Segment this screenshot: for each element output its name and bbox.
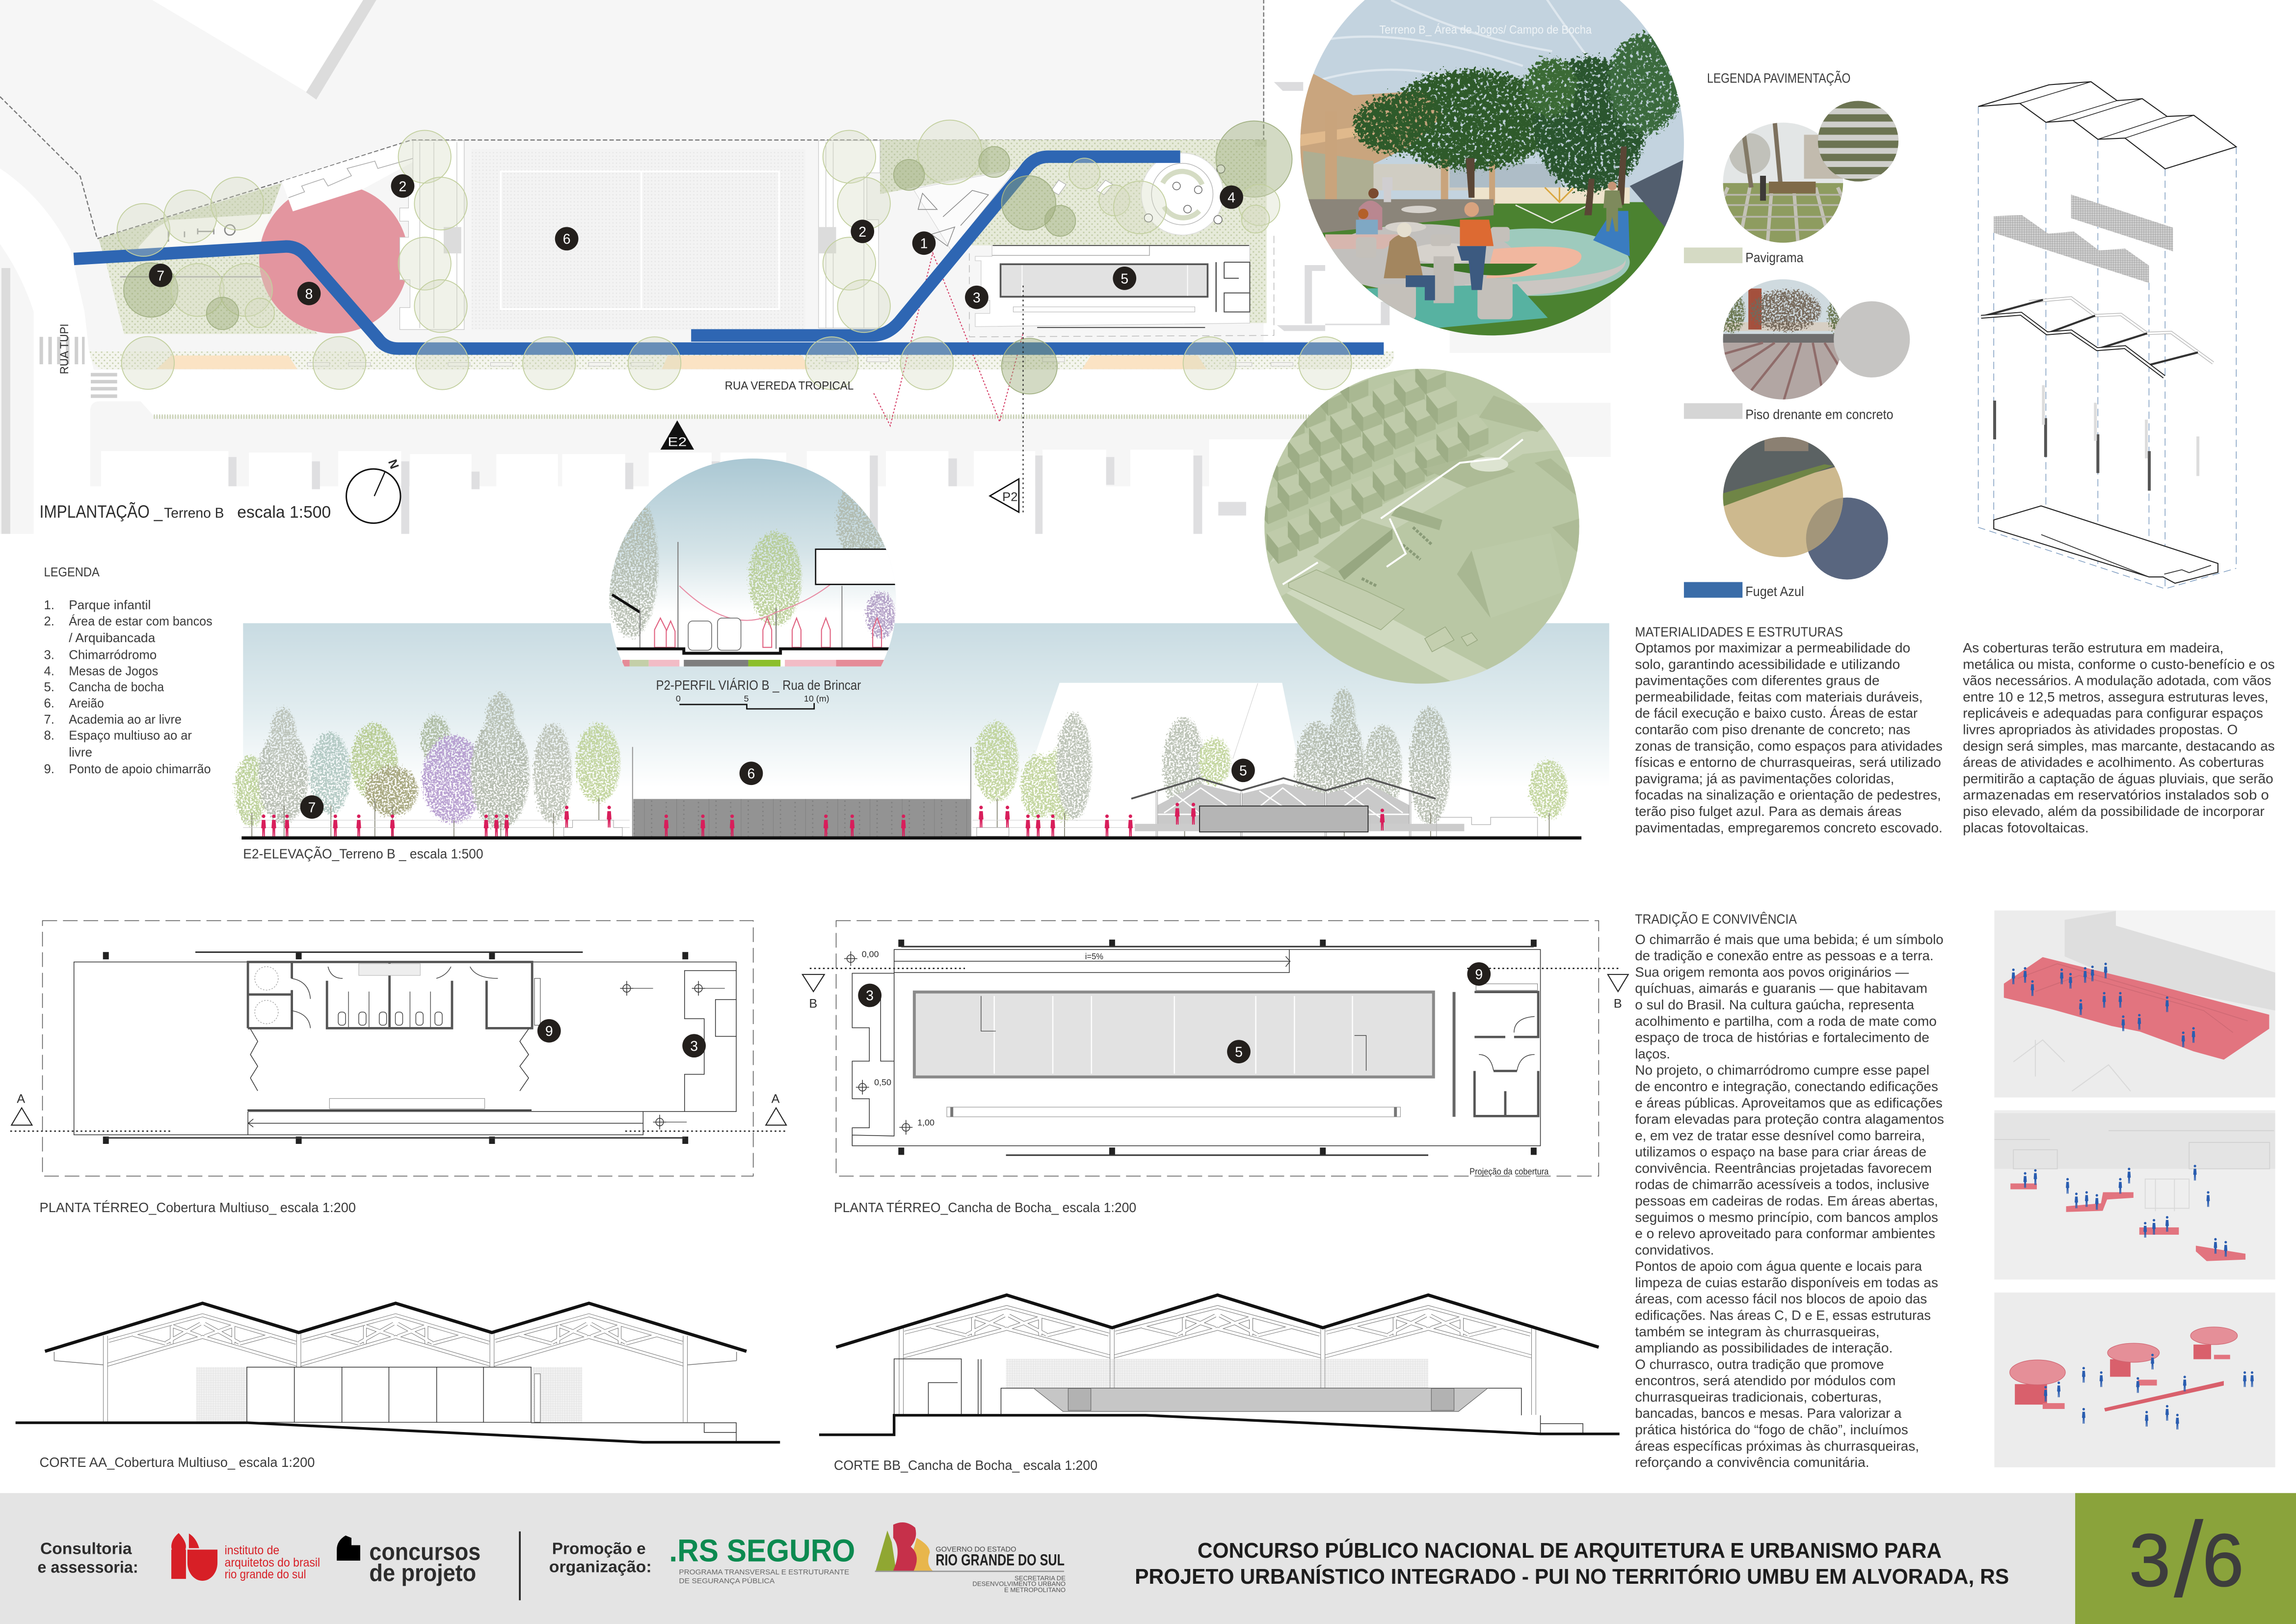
text block: tradição e convivência: limpeza de cuias estarão disponíveis em todas as [1635, 1275, 1938, 1290]
legend: Parque infantil [69, 598, 151, 612]
level marks [844, 951, 857, 966]
floor plan: cancha de bocha: 0,00 [862, 949, 879, 959]
footer band [0, 1493, 2296, 1624]
logo: Governo do Estado RS [875, 1522, 1066, 1594]
floor plan: cobertura multiuso: 3 [690, 1039, 698, 1055]
legend: Areião [69, 697, 104, 710]
bunting lines [874, 253, 1023, 426]
elevation trees [236, 688, 1568, 829]
render caption: Terreno B_ Área de Jogos/ Campo de Bocha [1379, 24, 1592, 37]
roof layer [1978, 81, 2236, 169]
text block: materialidades e estruturas: permeabilidade, feitas com materiais duráveis, [1635, 689, 1923, 704]
plaza surfaces [1437, 228, 1630, 296]
text block: coberturas: vãos necessários. A modulação adotada, com vãos [1963, 673, 2271, 688]
text block: coberturas: livres apropriados às atividades propostas. O [1963, 722, 2238, 737]
text block: coberturas: piso elevado, além da possibilidade de incorporar [1963, 804, 2265, 819]
legend: 4. [44, 664, 54, 678]
exploded axonometric of structure [1978, 81, 2236, 589]
panel: elevation E2 [236, 623, 1609, 839]
site plan markers: 2 [399, 179, 406, 194]
steps [852, 973, 894, 1145]
caption: plan A: PLANTA TÉRREO_Cobertura Multiuso_ escala 1:200 [40, 1200, 356, 1215]
mesh panels [2071, 194, 2173, 251]
base slab [1994, 506, 2218, 583]
text block: coberturas: áreas de atividades e acolhimento. As coberturas [1963, 755, 2264, 770]
legend: Cancha de bocha [69, 680, 164, 694]
logo: Governo do Estado RS: RIO GRANDE DO SUL [935, 1551, 1065, 1569]
text block: tradição e convivência: Pontos de apoio com água quente e locais para [1635, 1259, 1922, 1274]
swatch group: pavigrama [1684, 101, 1903, 265]
logo: RS Seguro [669, 1533, 855, 1585]
text block: tradição e convivência: também se integram às churrasqueiras, [1635, 1324, 1880, 1339]
main contest title: CONCURSO PÚBLICO NACIONAL DE ARQUITETURA E URBANISMO PARA [1198, 1539, 1942, 1563]
logo: Governo do Estado RS: GOVERNO DO ESTADO [935, 1545, 1016, 1553]
text block: coberturas: armazenadas em reservatórios instalados sob o [1963, 787, 2269, 803]
ramp [894, 949, 1290, 973]
legend: Ponto de apoio chimarrão [69, 762, 211, 776]
people [1384, 234, 1423, 278]
legend: Mesas de Jogos [69, 664, 158, 678]
text block: tradição e convivência: churrasqueiras tradicionais, coberturas, [1635, 1389, 1882, 1405]
swatch group: piso drenante: Piso drenante em concreto [1745, 406, 1894, 422]
image: axon chimarródromo stepped seating [1994, 910, 2275, 1097]
legend [44, 566, 213, 776]
floor plan: cobertura multiuso: A [17, 1092, 25, 1106]
bocha court [914, 992, 1434, 1077]
text block: materialidades e estruturas: zonas de transição, como espaços para atividades [1635, 738, 1943, 754]
tables and stools [1409, 243, 1482, 264]
game tables plaza [1141, 153, 1223, 235]
section AA [16, 1303, 780, 1442]
logo: concursos de projeto: de projeto [369, 1559, 476, 1586]
logo: Governo do Estado RS: E METROPOLITANO [1004, 1586, 1066, 1594]
white path [1282, 439, 1523, 584]
panel: site plan (implantação) [0, 0, 1611, 535]
legend: Chimarródromo [69, 649, 157, 662]
swatch group: piso drenante [1684, 278, 1910, 422]
legend: LEGENDA [44, 566, 100, 579]
page number panel [2075, 1493, 2296, 1624]
text block: tradição e convivência: utilizamos o espaço na base para criar áreas de [1635, 1144, 1926, 1160]
text block: coberturas: As coberturas terão estrutura em madeira, [1963, 640, 2223, 655]
multipurpose pink circle [259, 184, 408, 333]
text block: materialidades e estruturas: Optamos por maximizar a permeabilidade do [1635, 640, 1910, 655]
icon: north arrow: N [385, 458, 401, 471]
section marker P2: P2 [1002, 490, 1017, 504]
site plan markers: 3 [973, 290, 981, 306]
text block: tradição e convivência: foram elevadas para proteção contra alagamentos [1635, 1111, 1944, 1127]
section marks B [802, 974, 1629, 992]
text block: tradição e convivência: bancadas, bancos e mesas. Para valorizar a [1635, 1406, 1902, 1421]
legend: / Arquibancada [69, 631, 156, 645]
label: Rua Vereda Tropical: RUA VEREDA TROPICAL [725, 379, 854, 393]
text block: tradição e convivência: TRADIÇÃO E CONVIVÊNCIA [1635, 912, 1797, 927]
scale bar: 10 (m) [804, 694, 829, 704]
text block: tradição e convivência: O churrasco, outra tradição que promove [1635, 1357, 1884, 1372]
floor plan: cobertura multiuso [10, 920, 788, 1176]
legend: 6. [44, 697, 54, 710]
text block: materialidades e estruturas: MATERIALIDADES E ESTRUTURAS [1635, 624, 1843, 639]
swatch group: fulget azul [1684, 436, 1888, 599]
section marker E2 [661, 420, 694, 450]
text block: tradição e convivência: de encontro e integração, conectando edificações [1635, 1079, 1938, 1094]
text block: materialidades e estruturas: terão piso fulget azul. Para as demais áreas [1635, 804, 1901, 819]
main contest title [1135, 1539, 2009, 1589]
building [1299, 66, 1444, 227]
street benches [308, 357, 1293, 366]
crosswalks [40, 337, 84, 364]
text block: tradição e convivência: O chimarrão é mais que uma bebida; é um símbolo [1635, 932, 1944, 947]
text block: tradição e convivência: encontros, será atendido por módulos com [1635, 1373, 1896, 1388]
trees [117, 120, 1352, 394]
sand field [472, 149, 805, 329]
text block: coberturas: entre 10 e 12,5 metros, assegura estruturas leves, [1963, 689, 2269, 704]
section line P2 [1023, 286, 1024, 513]
text block: materialidades e estruturas: solo, garantindo acessibilidade e utilizando [1635, 657, 1900, 672]
section marker E2: E2 [667, 435, 687, 449]
legend: 5. [44, 680, 54, 694]
text block: tradição e convivência: rodas de chimarrão acessíveis a todos, inclusive [1635, 1177, 1929, 1192]
legend: 8. [44, 729, 54, 743]
floor plan: cancha de bocha [802, 920, 1629, 1177]
text block: materialidades e estruturas: pavigrama; já as pavimentações coloridas, [1635, 771, 1894, 786]
scale bar: 0 [676, 694, 681, 704]
site plan markers: 5 [1121, 271, 1128, 287]
text block: materialidades e estruturas: pavimentadas, empregaremos concreto escovado. [1635, 820, 1943, 835]
model blocks [1256, 358, 1489, 564]
dashed lot boundary [0, 0, 1264, 239]
panel: 3d massing model circle [1256, 358, 1589, 688]
legend: Espaço multiuso ao ar [69, 729, 192, 743]
site plan markers: 4 [1228, 190, 1235, 206]
rear frame [2029, 298, 2213, 363]
floor plan: cobertura multiuso: 9 [545, 1024, 553, 1039]
front frame [1981, 300, 2198, 365]
logo: IAB RS: instituto de [225, 1543, 279, 1557]
swatch group: pavigrama: Pavigrama [1745, 250, 1804, 265]
text block: materialidades e estruturas: pavimentações com diferentes graus de [1635, 673, 1880, 688]
text block: materialidades e estruturas: físicas e entorno de churrasqueiras, será utilizado [1635, 755, 1941, 770]
legend: 9. [44, 762, 54, 776]
logo: concursos de projeto [337, 1536, 481, 1586]
legend: 2. [44, 615, 54, 628]
pavigrama planting areas [99, 183, 282, 252]
logo: IAB RS: arquitetos do brasil [225, 1556, 320, 1570]
legend: 1. [44, 598, 54, 612]
page number panel: / [2174, 1500, 2204, 1620]
text block: coberturas: permitirão a captação de águas pluviais, que serão [1963, 771, 2273, 786]
text block: coberturas: replicáveis e adequadas para configurar espaços [1963, 705, 2263, 721]
swatch group: fulget azul: Fuget Azul [1745, 584, 1804, 599]
main house [1471, 533, 1564, 618]
logo: Governo do Estado RS: DESENVOLVIMENTO URBANO [972, 1580, 1066, 1588]
logo: RS Seguro: PROGRAMA TRANSVERSAL E ESTRUTURANTE [679, 1569, 849, 1576]
trees [1355, 34, 1682, 192]
footer text: promoção [549, 1539, 652, 1576]
image: axon barbecue canopies [1994, 1293, 2275, 1467]
outdoor gym white area [138, 214, 270, 247]
text block: materialidades e estruturas: contarão com piso drenante de concreto; nas [1635, 722, 1910, 737]
floor plan: cancha de bocha: 3 [866, 988, 874, 1004]
bocha building 5 [975, 245, 1250, 326]
footer text: promoção: Promoção e [552, 1539, 646, 1558]
text block: materialidades e estruturas: focadas na sinalização e orientação de pedestres, [1635, 787, 1941, 803]
caption: section AA: CORTE AA_Cobertura Multiuso_ escala 1:200 [40, 1455, 315, 1470]
playground [1545, 188, 1574, 202]
caption: plan B: PLANTA TÉRREO_Cancha de Bocha_ escala 1:200 [834, 1200, 1136, 1215]
text block: coberturas: metálica ou mista, conforme o custo-benefício e os [1963, 657, 2275, 672]
white zigzag seating [282, 140, 421, 212]
text block: coberturas: placas fotovoltaicas. [1963, 820, 2089, 835]
text block: tradição e convivência: pessoas em cadeiras de rodas. Em áreas abertas, [1635, 1193, 1938, 1209]
caption: elevation: E2-ELEVAÇÃO_Terreno B _ escala 1:500 [243, 846, 483, 861]
pavement colour strip [622, 660, 886, 667]
footer text: consultoria: e assessoria: [37, 1558, 138, 1577]
pink line figures and cars [655, 618, 881, 648]
floor plan: cancha de bocha: 0,50 [874, 1078, 891, 1087]
floor plan: cancha de bocha: 5 [1235, 1045, 1243, 1060]
label: Rua Tupi: RUA TUPI [58, 324, 71, 374]
logo: Governo do Estado RS: SECRETARIA DE [1015, 1574, 1066, 1582]
site plan markers: 1 [920, 236, 928, 252]
text block: tradição e convivência: e, em vez de tratar esse desnível como barreira, [1635, 1128, 1925, 1143]
pink people [261, 803, 1385, 837]
main contest title: PROJETO URBANÍSTICO INTEGRADO - PUI NO TERRITÓRIO UMBU EM ALVORADA, RS [1135, 1565, 2009, 1589]
project canopies [1313, 518, 1392, 571]
text block: tradição e convivência: prática histórica do “fogo de chão”, incluímos [1635, 1422, 1908, 1437]
text block: tradição e convivência: de tradição e conexão entre as pessoas e a terra. [1635, 948, 1934, 963]
text block: tradição e convivência: e o relevo aproveitado para conformar ambientes [1635, 1226, 1935, 1241]
text block: tradição e convivência: No projeto, o chimarródromo cumpre esse papel [1635, 1062, 1929, 1078]
text block: tradição e convivência: áreas específicas próximas às churrasqueiras, [1635, 1438, 1919, 1454]
text block: coberturas [1963, 640, 2275, 835]
floor plan: cancha de bocha: B [809, 997, 817, 1011]
floor plan: cancha de bocha: 9 [1475, 967, 1483, 982]
folding screens [250, 1029, 529, 1091]
title: implantação: Terreno B [164, 506, 224, 521]
site plan markers [149, 174, 1243, 309]
scale bar: 5 [744, 694, 749, 704]
columns [1995, 401, 2149, 490]
logo: IAB RS [171, 1533, 320, 1581]
floor plan: cancha de bocha: Projeção da cobertura [1469, 1166, 1549, 1177]
text block: tradição e convivência [1635, 912, 1944, 1470]
site plan markers: 7 [157, 268, 164, 284]
small kiosks [1425, 627, 1477, 652]
section BB [819, 1295, 1620, 1435]
text block: materialidades e estruturas [1635, 624, 1943, 835]
floor plan: cobertura multiuso: A [772, 1092, 780, 1106]
logo: RS Seguro: DE SEGURANÇA PÚBLICA [679, 1577, 774, 1585]
text block: tradição e convivência: laços. [1635, 1046, 1670, 1061]
footer text: consultoria [37, 1539, 138, 1577]
text block: tradição e convivência: áreas, com acesso fácil nos blocos de apoio das [1635, 1291, 1927, 1306]
panel: elevation E2: 5 [1239, 763, 1247, 779]
logo: RS Seguro: .RS SEGURO [669, 1533, 855, 1568]
legend: 3. [44, 649, 54, 662]
legend: Academia ao ar livre [69, 713, 182, 727]
legend: livre [69, 746, 92, 759]
title: implantação: IMPLANTAÇÃO _ [40, 502, 163, 522]
legend: Área de estar com bancos [69, 614, 213, 628]
panel: elevation E2: 6 [748, 766, 755, 782]
image: axon benches [1994, 1110, 2275, 1279]
far fence [1630, 160, 1684, 227]
projection guides [1978, 107, 2236, 589]
site plan markers: 2 [858, 224, 866, 240]
title: implantação [40, 502, 331, 522]
floor plan: cancha de bocha: i=5% [1085, 951, 1103, 961]
site plan markers: 8 [305, 286, 313, 302]
text block: tradição e convivência: convivência. Reentrâncias projetadas favorecem [1635, 1161, 1932, 1176]
panel: road profile circle P2 [600, 454, 908, 668]
restroom block [248, 962, 532, 1028]
text block: tradição e convivência: reforçando a convivência comunitária. [1635, 1455, 1869, 1470]
footer text: consultoria: Consultoria [40, 1539, 132, 1558]
floor plan: cancha de bocha: B [1614, 997, 1622, 1011]
title: implantação: escala 1:500 [237, 503, 331, 522]
text block: tradição e convivência: espaço de troca de histórias e fortalecimento de [1635, 1030, 1929, 1045]
text block: tradição e convivência: quíchuas, aimarás e guaranis — que habitavam [1635, 981, 1927, 996]
footer text: promoção: organização: [549, 1558, 652, 1576]
text block: tradição e convivência: o sul do Brasil. Na cultura gaúcha, representa [1635, 997, 1914, 1012]
text block: tradição e convivência: acolhimento e partilha, com a roda de mate como [1635, 1013, 1937, 1029]
bocha restrooms [1474, 992, 1538, 1116]
logo: concursos de projeto: concursos [369, 1538, 481, 1565]
page number panel: 6 [2202, 1518, 2244, 1602]
blue fulget paths [74, 246, 1384, 349]
text block: tradição e convivência: ampliando as possibilidades de interação. [1635, 1340, 1893, 1355]
section marker P2 [990, 479, 1019, 512]
orange sand strips [157, 355, 1206, 369]
playground [913, 169, 1016, 250]
legend: 7. [44, 713, 54, 727]
fence wall 6 [633, 799, 971, 837]
ground line [241, 837, 1581, 839]
text block: tradição e convivência: Sua origem remonta aos povos originários — [1635, 964, 1909, 979]
floor plan: cancha de bocha: 1,00 [917, 1118, 934, 1128]
bench [947, 1107, 1400, 1117]
scale bar [676, 694, 829, 709]
seating terraces [400, 140, 464, 329]
caption: section BB: CORTE BB_Cancha de Bocha_ escala 1:200 [834, 1458, 1097, 1473]
panel: elevation E2: 7 [308, 800, 316, 815]
panel: render photo circle [1296, 0, 1691, 349]
page number panel: 3 [2129, 1518, 2171, 1602]
icon: north arrow [347, 458, 401, 523]
text block: tradição e convivência: edificações. Nas áreas C, D e E, essas estruturas [1635, 1308, 1931, 1323]
building 5 in elevation [1157, 784, 1410, 825]
heading: paving legend: LEGENDA PAVIMENTAÇÃO [1707, 71, 1850, 86]
text block: tradição e convivência: convidativos. [1635, 1242, 1714, 1257]
caption: road profile: P2-PERFIL VIÁRIO B _ Rua de Brincar [656, 677, 861, 693]
text block: coberturas: design será simples, mas marcante, destacando as [1963, 738, 2275, 754]
text block: tradição e convivência: seguimos o mesmo princípio, com bancos amplos [1635, 1210, 1938, 1225]
site plan markers: 6 [563, 232, 570, 247]
text block: materialidades e estruturas: de fácil execução e baixo custo. Áreas de estar [1635, 705, 1918, 721]
section marks A [11, 1108, 786, 1125]
text block: tradição e convivência: e áreas públicas. Aproveitamos que as edificações [1635, 1095, 1943, 1110]
logo: IAB RS: rio grande do sul [225, 1568, 306, 1581]
